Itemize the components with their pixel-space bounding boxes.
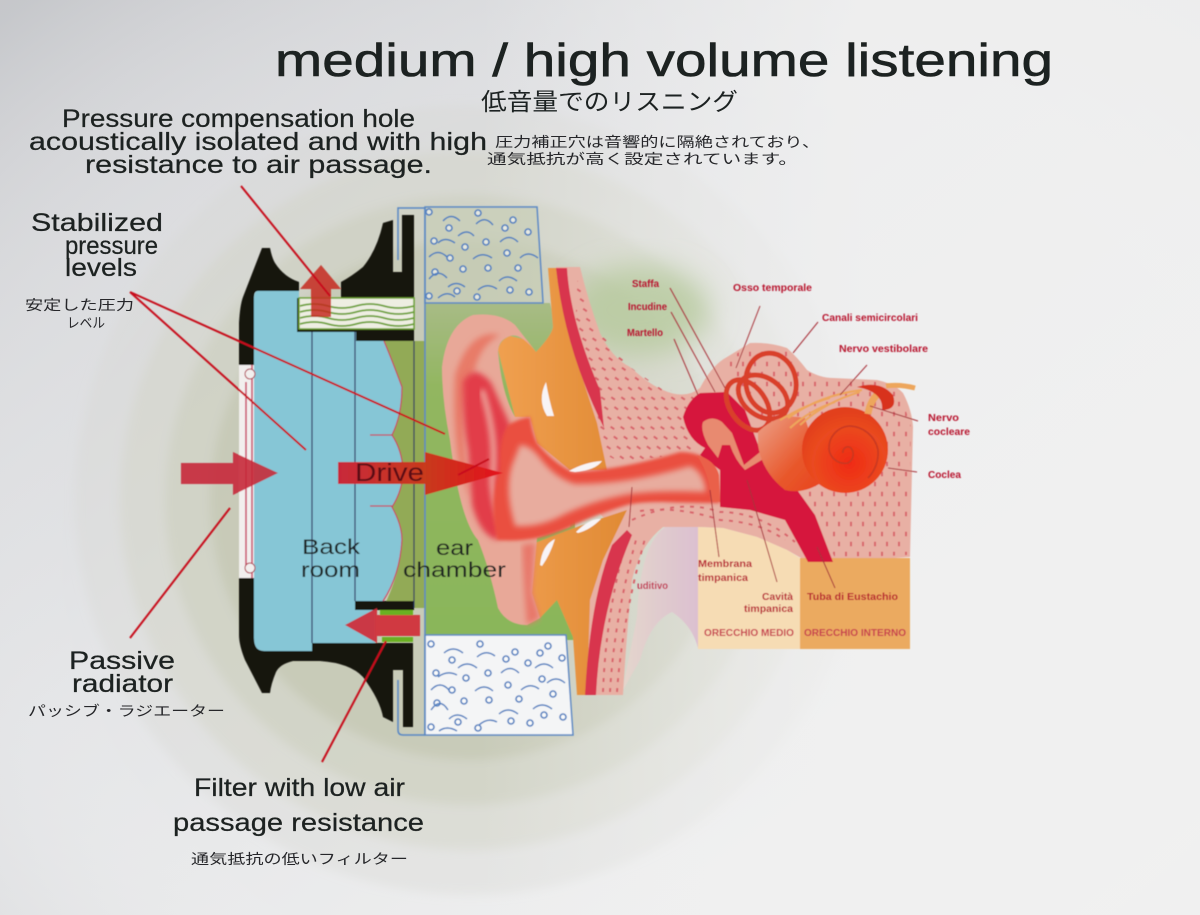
japanese note: 圧力補正穴は音響的に隔絶されており、 [495, 134, 820, 150]
labels: anatomy: timpanica [698, 573, 748, 584]
filter caption: Filter with low air [194, 774, 405, 802]
labels: anatomy: Canali semicircolari [822, 313, 918, 324]
diagram labels: Back [302, 536, 361, 559]
middle ear panel [698, 527, 910, 649]
japanese note [487, 134, 820, 167]
front chamber [383, 341, 425, 608]
diagram labels: room [301, 559, 360, 582]
filter caption: passage resistance [173, 809, 424, 837]
labels: anatomy: Incudine [628, 302, 667, 313]
housing upper left [239, 248, 299, 365]
back room cavity [254, 291, 403, 651]
speckles [575, 280, 912, 692]
diagram labels: chamber [403, 559, 506, 582]
speaker housing and back room [239, 215, 425, 727]
temporal bone [556, 267, 913, 695]
stabilized pressure caption [25, 209, 163, 331]
filter caption: 通気抵抗の低いフィルター [191, 851, 408, 867]
driver membrane [370, 341, 403, 601]
semicircular canals [717, 349, 801, 438]
passive radiator caption [28, 647, 225, 719]
arrow: passive radiator [181, 452, 278, 495]
stabilized pressure caption: レベル [67, 315, 105, 331]
outer ear [442, 314, 720, 625]
ear chamber green field [425, 303, 575, 640]
pressure compensation filter [299, 298, 414, 329]
japanese subtitle: 低音量でのリスニング [481, 89, 738, 116]
labels: anatomy: Nervo [928, 413, 959, 424]
labels: anatomy: Nervo vestibolare [839, 344, 928, 355]
pressure hole caption: acoustically isolated and with high [29, 128, 487, 156]
lower side area [622, 527, 698, 692]
concha and canal pale interior [509, 445, 706, 526]
housing lower [239, 578, 414, 727]
title: medium / high volume listening [275, 34, 1053, 86]
labels: anatomy: uditivo [637, 581, 668, 592]
antihelix ridge [482, 390, 505, 530]
labels: anatomy: Membrana [698, 559, 752, 570]
diagram labels [301, 459, 506, 582]
cartilage highlights [540, 382, 602, 566]
ear illustration [442, 260, 915, 695]
internal walls [312, 332, 414, 643]
labels: anatomy: Staffa [632, 279, 659, 290]
stabilized pressure caption: Stabilized [31, 209, 163, 237]
stabilized pressure caption: levels [65, 254, 137, 282]
pressure hole caption: resistance to air passage. [85, 151, 432, 179]
pressure hole caption: Pressure compensation hole [62, 105, 415, 133]
concha and canal red [493, 417, 720, 541]
labels: anatomy: Cavità [762, 592, 793, 603]
foam bottom [425, 635, 573, 735]
diagram labels: ear [436, 537, 473, 560]
blue enclosure outline [398, 207, 425, 735]
labels: anatomy: Martello [627, 328, 663, 339]
filter caption [173, 774, 424, 867]
labels: anatomy: timpanica [744, 604, 793, 615]
red ear wall [556, 268, 632, 695]
passive radiator [239, 365, 255, 578]
tympanic membrane [697, 455, 720, 502]
labels: anatomy: Tuba di Eustachio [807, 592, 898, 603]
arrow: air out through pressure hole [300, 265, 341, 317]
leader lines [629, 288, 918, 588]
labels: anatomy: cocleare [928, 427, 970, 438]
pressure hole caption [29, 105, 487, 179]
housing upper right [297, 215, 414, 341]
passive radiator caption: Passive [69, 647, 175, 675]
cochlea [802, 407, 888, 493]
helix bright red [463, 372, 516, 540]
orange tissue [498, 268, 627, 695]
arrow: return through filter [345, 608, 420, 643]
foam top [425, 207, 543, 303]
labels: anatomy: Coclea [928, 470, 961, 481]
japanese note: 通気抵抗が高く設定されています。 [487, 151, 798, 167]
lobe shading [522, 543, 540, 625]
passive radiator caption: radiator [72, 670, 173, 698]
pinna rim shading [454, 334, 500, 500]
stabilized pressure caption: pressure [65, 232, 158, 260]
labels: anatomy: ORECCHIO MEDIO [704, 628, 794, 639]
passive radiator caption: パッシブ・ラジエーター [28, 703, 225, 719]
diagram labels: Drive [355, 459, 424, 487]
labels: anatomy: Osso temporale [733, 283, 812, 294]
labels: anatomy: ORECCHIO INTERNO [804, 628, 906, 639]
cochlear nerve end [857, 385, 894, 410]
ossicles [702, 418, 780, 470]
vestibule [758, 417, 825, 491]
labels: anatomy [627, 279, 970, 639]
nerves [780, 385, 915, 428]
stabilized pressure caption: 安定した圧力 [25, 297, 134, 313]
arrow: drive [338, 452, 503, 495]
tympanic cavity [683, 392, 833, 562]
red callout lines [130, 186, 489, 762]
